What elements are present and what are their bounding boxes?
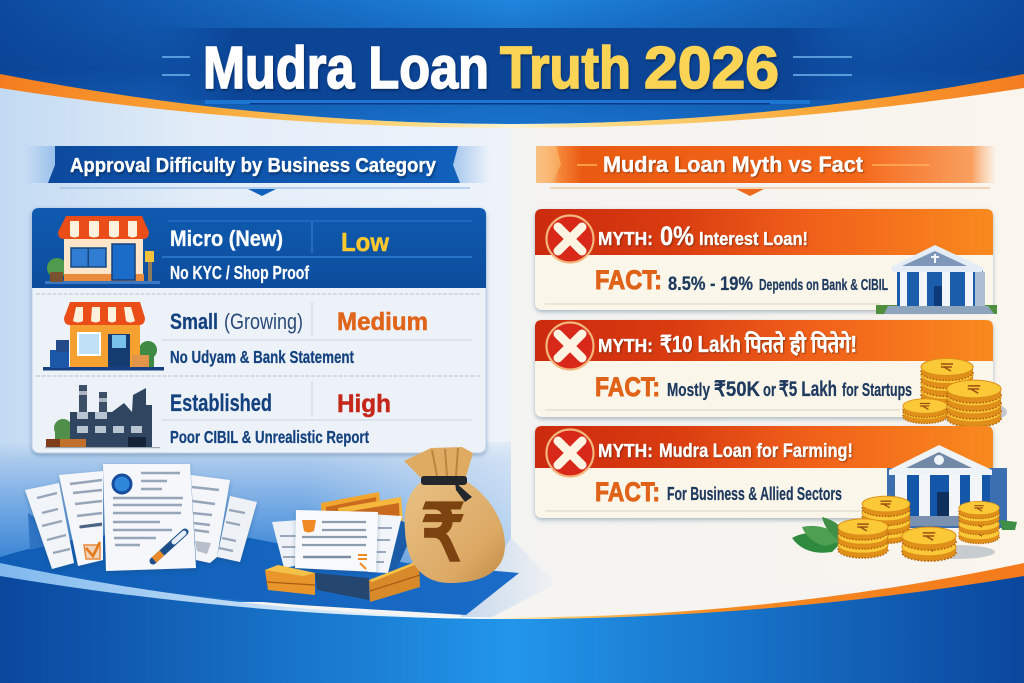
footer wave bbox=[0, 570, 1024, 683]
row: small bbox=[170, 308, 428, 367]
row: established: Poor CIBIL & Unrealistic Report bbox=[170, 427, 369, 447]
icon: small shop bbox=[43, 302, 164, 370]
fact text 1: FACT: bbox=[595, 265, 662, 295]
row: established bbox=[170, 390, 391, 447]
title: Truth bbox=[500, 35, 631, 101]
fact text 2: ₹50K bbox=[714, 378, 760, 401]
icon: micro shop bbox=[45, 216, 160, 284]
myth text 1: Interest Loan! bbox=[699, 229, 808, 249]
myth text 3 bbox=[598, 441, 853, 462]
icon: bank 2 bbox=[887, 445, 1007, 528]
title: Mudra Loan bbox=[203, 35, 489, 101]
icon: rupee money bag: ₹ bbox=[421, 489, 465, 577]
title: 2026 bbox=[644, 35, 779, 101]
myth text 2: MYTH: bbox=[598, 336, 653, 356]
row: small: (Growing) bbox=[224, 309, 303, 334]
fact text 1: 8.5% - 19% bbox=[668, 274, 753, 295]
icon: cross 3 bbox=[546, 430, 594, 476]
icon: cross 2 bbox=[546, 322, 594, 370]
title bbox=[203, 35, 779, 101]
myth text 3: MYTH: bbox=[598, 441, 653, 461]
row: micro: Low bbox=[341, 227, 390, 257]
icon: bank 1 bbox=[876, 245, 997, 314]
document: back right bbox=[191, 475, 230, 563]
footer light band bbox=[0, 563, 1024, 619]
fact text 1: Depends on Bank & CIBIL bbox=[759, 277, 888, 294]
icon: leaves bbox=[792, 517, 1017, 553]
myth text 2 bbox=[598, 330, 857, 357]
fact text 1 bbox=[595, 265, 888, 295]
panel: myth vs fact heading: Mudra Loan Myth vs Fact bbox=[603, 152, 864, 177]
row: established: High bbox=[337, 390, 391, 418]
panel: myth card 2 bbox=[535, 320, 1007, 427]
row: micro: Micro (New) bbox=[170, 226, 283, 251]
myth text 2: ₹10 Lakh bbox=[660, 331, 741, 357]
row: small: Medium bbox=[337, 308, 428, 336]
myth text 3: Mudra Loan for Farming! bbox=[659, 441, 853, 462]
row: micro bbox=[170, 226, 390, 283]
panel: myth vs fact heading bbox=[536, 146, 995, 196]
row: established: Established bbox=[170, 390, 272, 417]
document: far left bbox=[25, 483, 74, 569]
row: small: Small bbox=[170, 309, 218, 334]
myth text 2: पितते ही पितेगे! bbox=[744, 330, 857, 357]
myth text 1: 0% bbox=[660, 221, 694, 251]
icon: factory bbox=[45, 385, 160, 448]
fact text 2: for Startups bbox=[842, 380, 912, 400]
panel: business category table bbox=[32, 208, 486, 453]
icon: paper and folder stack bbox=[265, 492, 420, 602]
platform under illustrations bbox=[0, 513, 519, 615]
icon: rupee money bag bbox=[404, 447, 505, 583]
fact text 2: FACT: bbox=[595, 372, 660, 402]
fact text 2 bbox=[595, 372, 912, 402]
row: small: No Udyam & Bank Statement bbox=[170, 347, 354, 367]
document: far right bbox=[217, 496, 257, 562]
fact text 2: ₹5 Lakh bbox=[779, 378, 837, 401]
fact text 3: For Business & Allied Sectors bbox=[667, 484, 842, 504]
fact text 2: or bbox=[763, 380, 776, 400]
icon: coin stacks 1 bbox=[903, 358, 1007, 427]
myth text 1 bbox=[598, 221, 808, 251]
fact text 3: FACT: bbox=[595, 477, 660, 507]
row: micro: No KYC / Shop Proof bbox=[170, 263, 310, 283]
document: back left bbox=[59, 471, 103, 566]
icon: bank with coins bbox=[792, 445, 1017, 561]
fact text 3 bbox=[595, 477, 842, 507]
header banner bbox=[0, 0, 1024, 128]
document: main bbox=[103, 464, 196, 571]
icon: cross 1 bbox=[546, 216, 594, 262]
panel: approval difficulty heading bbox=[25, 146, 490, 196]
fact text 2: Mostly bbox=[667, 380, 710, 400]
icon: document fan bbox=[25, 464, 257, 571]
panel: approval difficulty heading: Approval Difficulty by Business Category bbox=[70, 155, 437, 177]
panel: myth card 1 bbox=[535, 209, 997, 314]
icon: coin stacks 2 bbox=[838, 496, 999, 561]
myth text 1: MYTH: bbox=[598, 229, 653, 249]
panel: myth card 3 bbox=[535, 426, 993, 518]
